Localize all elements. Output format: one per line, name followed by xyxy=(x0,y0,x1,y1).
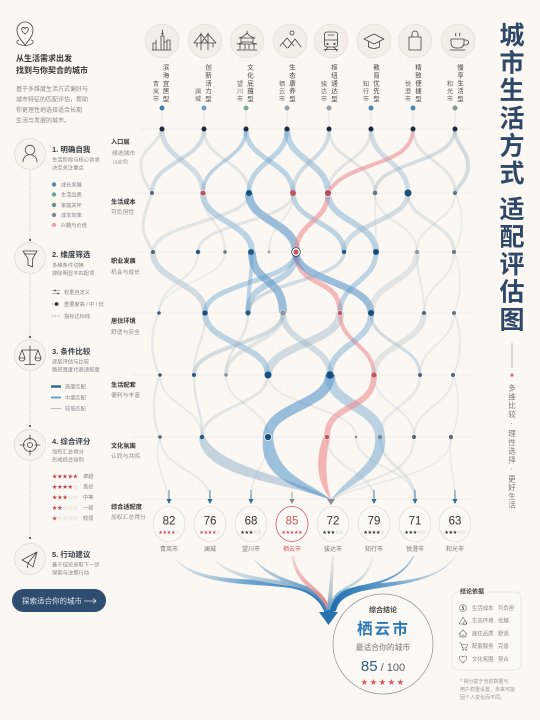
row dotted guide lines xyxy=(132,129,474,499)
step 5: action: 探索与决策行动 xyxy=(52,568,89,576)
step 2: dimension filter: 2. 维度筛选 xyxy=(52,249,91,259)
score: 和光市 63 xyxy=(439,506,471,553)
score: 青岚市 82 xyxy=(153,506,185,553)
legend: star ratings: ★☆☆☆☆ xyxy=(52,514,78,522)
row labels: 职业发展 xyxy=(111,257,136,265)
footnote xyxy=(460,678,515,701)
flow chart: career to housing xyxy=(153,252,460,313)
conclusion circle: 85 / 100 xyxy=(361,658,405,675)
icon: skyline xyxy=(145,24,179,58)
row labels: 居住环境 xyxy=(111,317,136,325)
step 5: action: 5. 行动建议 xyxy=(52,549,91,559)
step connector lines xyxy=(29,171,31,537)
panel: conclusion basis: 文化氛围 xyxy=(472,657,494,663)
icon: coffee cup xyxy=(441,24,475,58)
panel: conclusion basis: 舒适 xyxy=(498,630,509,638)
column labels: 滨海宜居型 xyxy=(161,63,169,103)
step 4: overall score: 形成综合级别 xyxy=(52,456,84,464)
column labels: 和光市 xyxy=(446,80,453,103)
column labels: 生态康养型 xyxy=(288,63,296,103)
icon: map pin with heart xyxy=(17,22,33,46)
conclusion circle: 栖云市 xyxy=(357,619,410,638)
row labels: 便利与丰富 xyxy=(111,391,140,399)
score: 青岚市 82: 82 xyxy=(163,516,175,528)
conclusion circle: 最适合你的城市 xyxy=(356,642,410,652)
score: 望川市 68: ★★★☆☆ xyxy=(241,528,262,536)
legend: priorities xyxy=(52,180,87,229)
score: 望川市 68: 68 xyxy=(245,516,257,528)
flow chart: housing to amenities xyxy=(152,313,460,375)
button: explore xyxy=(12,589,106,612)
step 1: clarify yourself xyxy=(14,138,100,229)
step 3: condition compare: 路径宽度代表适配度 xyxy=(52,366,100,374)
panel: conclusion basis: 生活成本 xyxy=(472,606,494,612)
column labels: 慢享生活型 xyxy=(456,63,464,103)
score: 澜城 76: 76 xyxy=(204,516,216,528)
score: 知行市 79: ★★★★☆ xyxy=(364,528,385,536)
panel: conclusion basis: 居住品质 xyxy=(472,632,494,638)
column labels: 文化底蕴型 xyxy=(246,63,254,103)
score: 和光市 63: 63 xyxy=(449,516,461,528)
row labels: 生活成本 xyxy=(111,198,137,206)
legend: star ratings: ★★★★★ xyxy=(52,473,78,480)
city type headers xyxy=(145,24,475,129)
legend: path width xyxy=(51,382,87,412)
column labels: 澜城 xyxy=(194,87,201,103)
icon: person xyxy=(14,138,46,170)
step 3: condition compare xyxy=(14,340,100,412)
legend: priorities: 生活品质 xyxy=(61,190,82,198)
heading: intro: 找到与你契合的城市 xyxy=(16,65,88,75)
score: 和光市 63: ★★★☆☆ xyxy=(445,528,466,536)
icon: coin xyxy=(460,604,466,612)
column labels: 创新活力型 xyxy=(204,63,212,103)
icon: funnel xyxy=(14,242,46,274)
legend: node key: 指标达标线 xyxy=(64,312,90,320)
step 4: overall score xyxy=(14,430,94,522)
icon: shopping bag xyxy=(398,24,432,58)
panel: conclusion basis: 生态环境 xyxy=(472,618,494,624)
text block: intro: 城市特征的匹配评估，帮助 xyxy=(16,96,88,104)
step 5: action xyxy=(14,544,100,576)
legend: star ratings: ★★★★☆ xyxy=(52,482,78,490)
score: 骏达市 72 xyxy=(317,506,349,553)
icon: target xyxy=(14,430,46,460)
title: 城市生活方式 适配评估图 xyxy=(494,21,530,334)
icon: heart xyxy=(459,656,467,663)
score: 栖云市 85: 栖云市 xyxy=(283,545,301,553)
score: 澜城 76: 澜城 xyxy=(204,545,216,553)
flow chart: cost to career xyxy=(143,193,462,252)
score: 骏达市 72: 72 xyxy=(327,516,339,528)
legend: priorities: 成本效率 xyxy=(61,211,82,219)
score: 望川市 68 xyxy=(235,506,267,553)
icon: pagoda xyxy=(230,24,264,58)
icon: mountains xyxy=(273,24,307,58)
score: 知行市 79 xyxy=(358,506,390,553)
flow chart: amenities to culture xyxy=(154,375,458,437)
icon: graduation cap xyxy=(357,24,391,58)
panel: conclusion basis: 可负担 xyxy=(498,604,515,612)
column labels: 精致便捷型 xyxy=(414,63,422,103)
step 1: clarify yourself: 生活阶段与核心诉求 xyxy=(52,156,100,164)
footnote: 因个人变化而不同。 xyxy=(460,694,505,701)
score: 骏达市 72: 骏达市 xyxy=(324,545,342,553)
step 5: action: 基于结论采取下一步 xyxy=(52,560,100,568)
step 4: overall score: 加权汇总得分 xyxy=(52,448,84,456)
score: 悦澄市 71: 71 xyxy=(409,516,421,528)
panel: conclusion basis xyxy=(452,588,521,670)
step 2: dimension filter: 排除明显不匹配项 xyxy=(52,269,95,277)
column labels: 枢纽通达型 xyxy=(330,63,338,103)
text block: intro: 基于多维度生活方式偏好与 xyxy=(16,85,88,93)
legend: star ratings: 中等 xyxy=(83,493,93,501)
step 1: clarify yourself: 决定关注重点 xyxy=(52,164,84,172)
nodes xyxy=(150,126,458,440)
column labels: 教育优先型 xyxy=(372,63,380,103)
score circles xyxy=(153,506,471,553)
score: 望川市 68: 望川市 xyxy=(242,545,260,553)
text block: intro xyxy=(16,85,88,124)
legend: path width: 较低匹配 xyxy=(65,404,87,412)
step 1: clarify yourself: 1. 明确自我 xyxy=(52,144,91,154)
conclusion circle: ★★★★★ xyxy=(361,676,406,686)
text block: intro: 生活与发展的城市。 xyxy=(16,116,70,124)
icon: cart xyxy=(459,643,468,650)
legend: star ratings: ★★★☆☆ xyxy=(52,493,78,501)
score: 知行市 79: 79 xyxy=(368,516,380,528)
step 2: dimension filter xyxy=(14,242,105,320)
footnote: 用户权重设置，未来可能 xyxy=(460,686,515,693)
row labels xyxy=(111,139,146,521)
row labels: 综合适配度 xyxy=(111,503,143,511)
score: 澜城 76: ★★★★☆ xyxy=(200,528,221,536)
text block: intro: 你更理性地选择适合长期 xyxy=(16,106,82,114)
legend: path width: 高度匹配 xyxy=(65,382,87,390)
legend: node key: 重要度高 / 中 / 低 xyxy=(64,300,105,308)
button: explore: 探索适合你的城市 xyxy=(22,595,82,605)
panel: conclusion basis: 结论依据 xyxy=(460,588,484,596)
panel: conclusion basis: 完善 xyxy=(498,642,509,650)
legend: path width: 中度匹配 xyxy=(65,394,87,402)
arrows into scores xyxy=(166,490,458,505)
legend: node key: 权重自定义 xyxy=(64,288,90,296)
score: 澜城 76 xyxy=(194,506,226,553)
score: 悦澄市 71: ★★★☆☆ xyxy=(405,528,426,536)
legend: star ratings: 卓越 xyxy=(83,472,94,480)
score: 栖云市 85 xyxy=(276,506,308,553)
panel: conclusion basis: 优越 xyxy=(498,616,509,624)
column labels: 青岚市 xyxy=(152,80,159,103)
score: 栖云市 85: ★★★★★ xyxy=(282,530,303,536)
column dots xyxy=(160,106,458,129)
conclusion circle xyxy=(333,594,433,694)
footnote: * 得分基于当前数据与 xyxy=(460,678,508,685)
legend: star ratings: 一般 xyxy=(83,504,93,512)
step 3: condition compare: 逐层评估与比较 xyxy=(52,358,90,366)
converging flow into conclusion xyxy=(173,556,456,625)
score: 栖云市 85: 85 xyxy=(286,516,298,528)
score: 和光市 63: 和光市 xyxy=(446,545,464,553)
score: 知行市 79: 知行市 xyxy=(365,545,383,553)
arrow head xyxy=(319,612,338,625)
score: 青岚市 82: 青岚市 xyxy=(160,545,178,553)
subtitle: 多维比较 · 理性选择 · 更好生活 xyxy=(507,383,516,510)
step 2: dimension filter: 多维条件切换 xyxy=(52,261,84,269)
row labels: 入口层 xyxy=(111,139,130,146)
row labels: 候选城市 xyxy=(112,149,135,157)
icon: house xyxy=(459,630,467,637)
row labels: (8选项) xyxy=(113,158,129,166)
row labels: 加权汇总得分 xyxy=(111,513,146,521)
heading: intro: 从生活需求出发 xyxy=(16,53,72,63)
icon: bridge xyxy=(188,24,222,58)
legend: star ratings: 良好 xyxy=(83,482,93,490)
row labels: 生活配套 xyxy=(111,381,137,389)
column labels: 栖云市 xyxy=(278,80,285,103)
icon: environment xyxy=(459,617,467,625)
legend: star ratings xyxy=(52,472,94,522)
heading: intro xyxy=(16,53,88,75)
step 4: overall score: 4. 综合评分 xyxy=(52,436,91,446)
flow chart: culture to composite score xyxy=(157,437,455,500)
column labels: 知行市 xyxy=(362,80,369,103)
legend: star ratings: 较弱 xyxy=(83,514,93,522)
score: 悦澄市 71: 悦澄市 xyxy=(406,545,424,553)
icon: train xyxy=(314,24,348,58)
step 3: condition compare: 3. 条件比较 xyxy=(52,346,91,356)
panel: conclusion basis: 配套服务 xyxy=(472,644,494,650)
icon: paper plane xyxy=(14,544,46,574)
panel: conclusion basis: 契合 xyxy=(498,655,509,663)
icon: scales xyxy=(14,340,46,370)
row labels: 可负担性 xyxy=(111,208,134,216)
row labels: 机会与成长 xyxy=(111,268,140,276)
legend: node key xyxy=(52,288,105,320)
legend: star ratings: ★★☆☆☆ xyxy=(52,504,78,512)
score: 骏达市 72: ★★★☆☆ xyxy=(323,528,344,536)
flow chart: entry to cost xyxy=(141,129,468,193)
score: 悦澄市 71 xyxy=(399,506,431,553)
column labels xyxy=(152,63,464,103)
column labels: 悦澄市 xyxy=(404,80,411,103)
legend: priorities: 兴趣与价值 xyxy=(61,221,87,229)
legend: priorities: 成长发展 xyxy=(61,180,82,188)
row labels: 舒适与安全 xyxy=(111,328,140,336)
legend: priorities: 家庭关怀 xyxy=(61,201,82,209)
column labels: 望川市 xyxy=(236,80,243,103)
row labels: 文化氛围 xyxy=(111,442,136,450)
row labels: 认同与共鸣 xyxy=(111,452,140,460)
column labels: 骏达市 xyxy=(320,80,327,103)
conclusion circle: 综合结论 xyxy=(369,605,397,614)
score: 青岚市 82: ★★★★☆ xyxy=(159,528,180,536)
